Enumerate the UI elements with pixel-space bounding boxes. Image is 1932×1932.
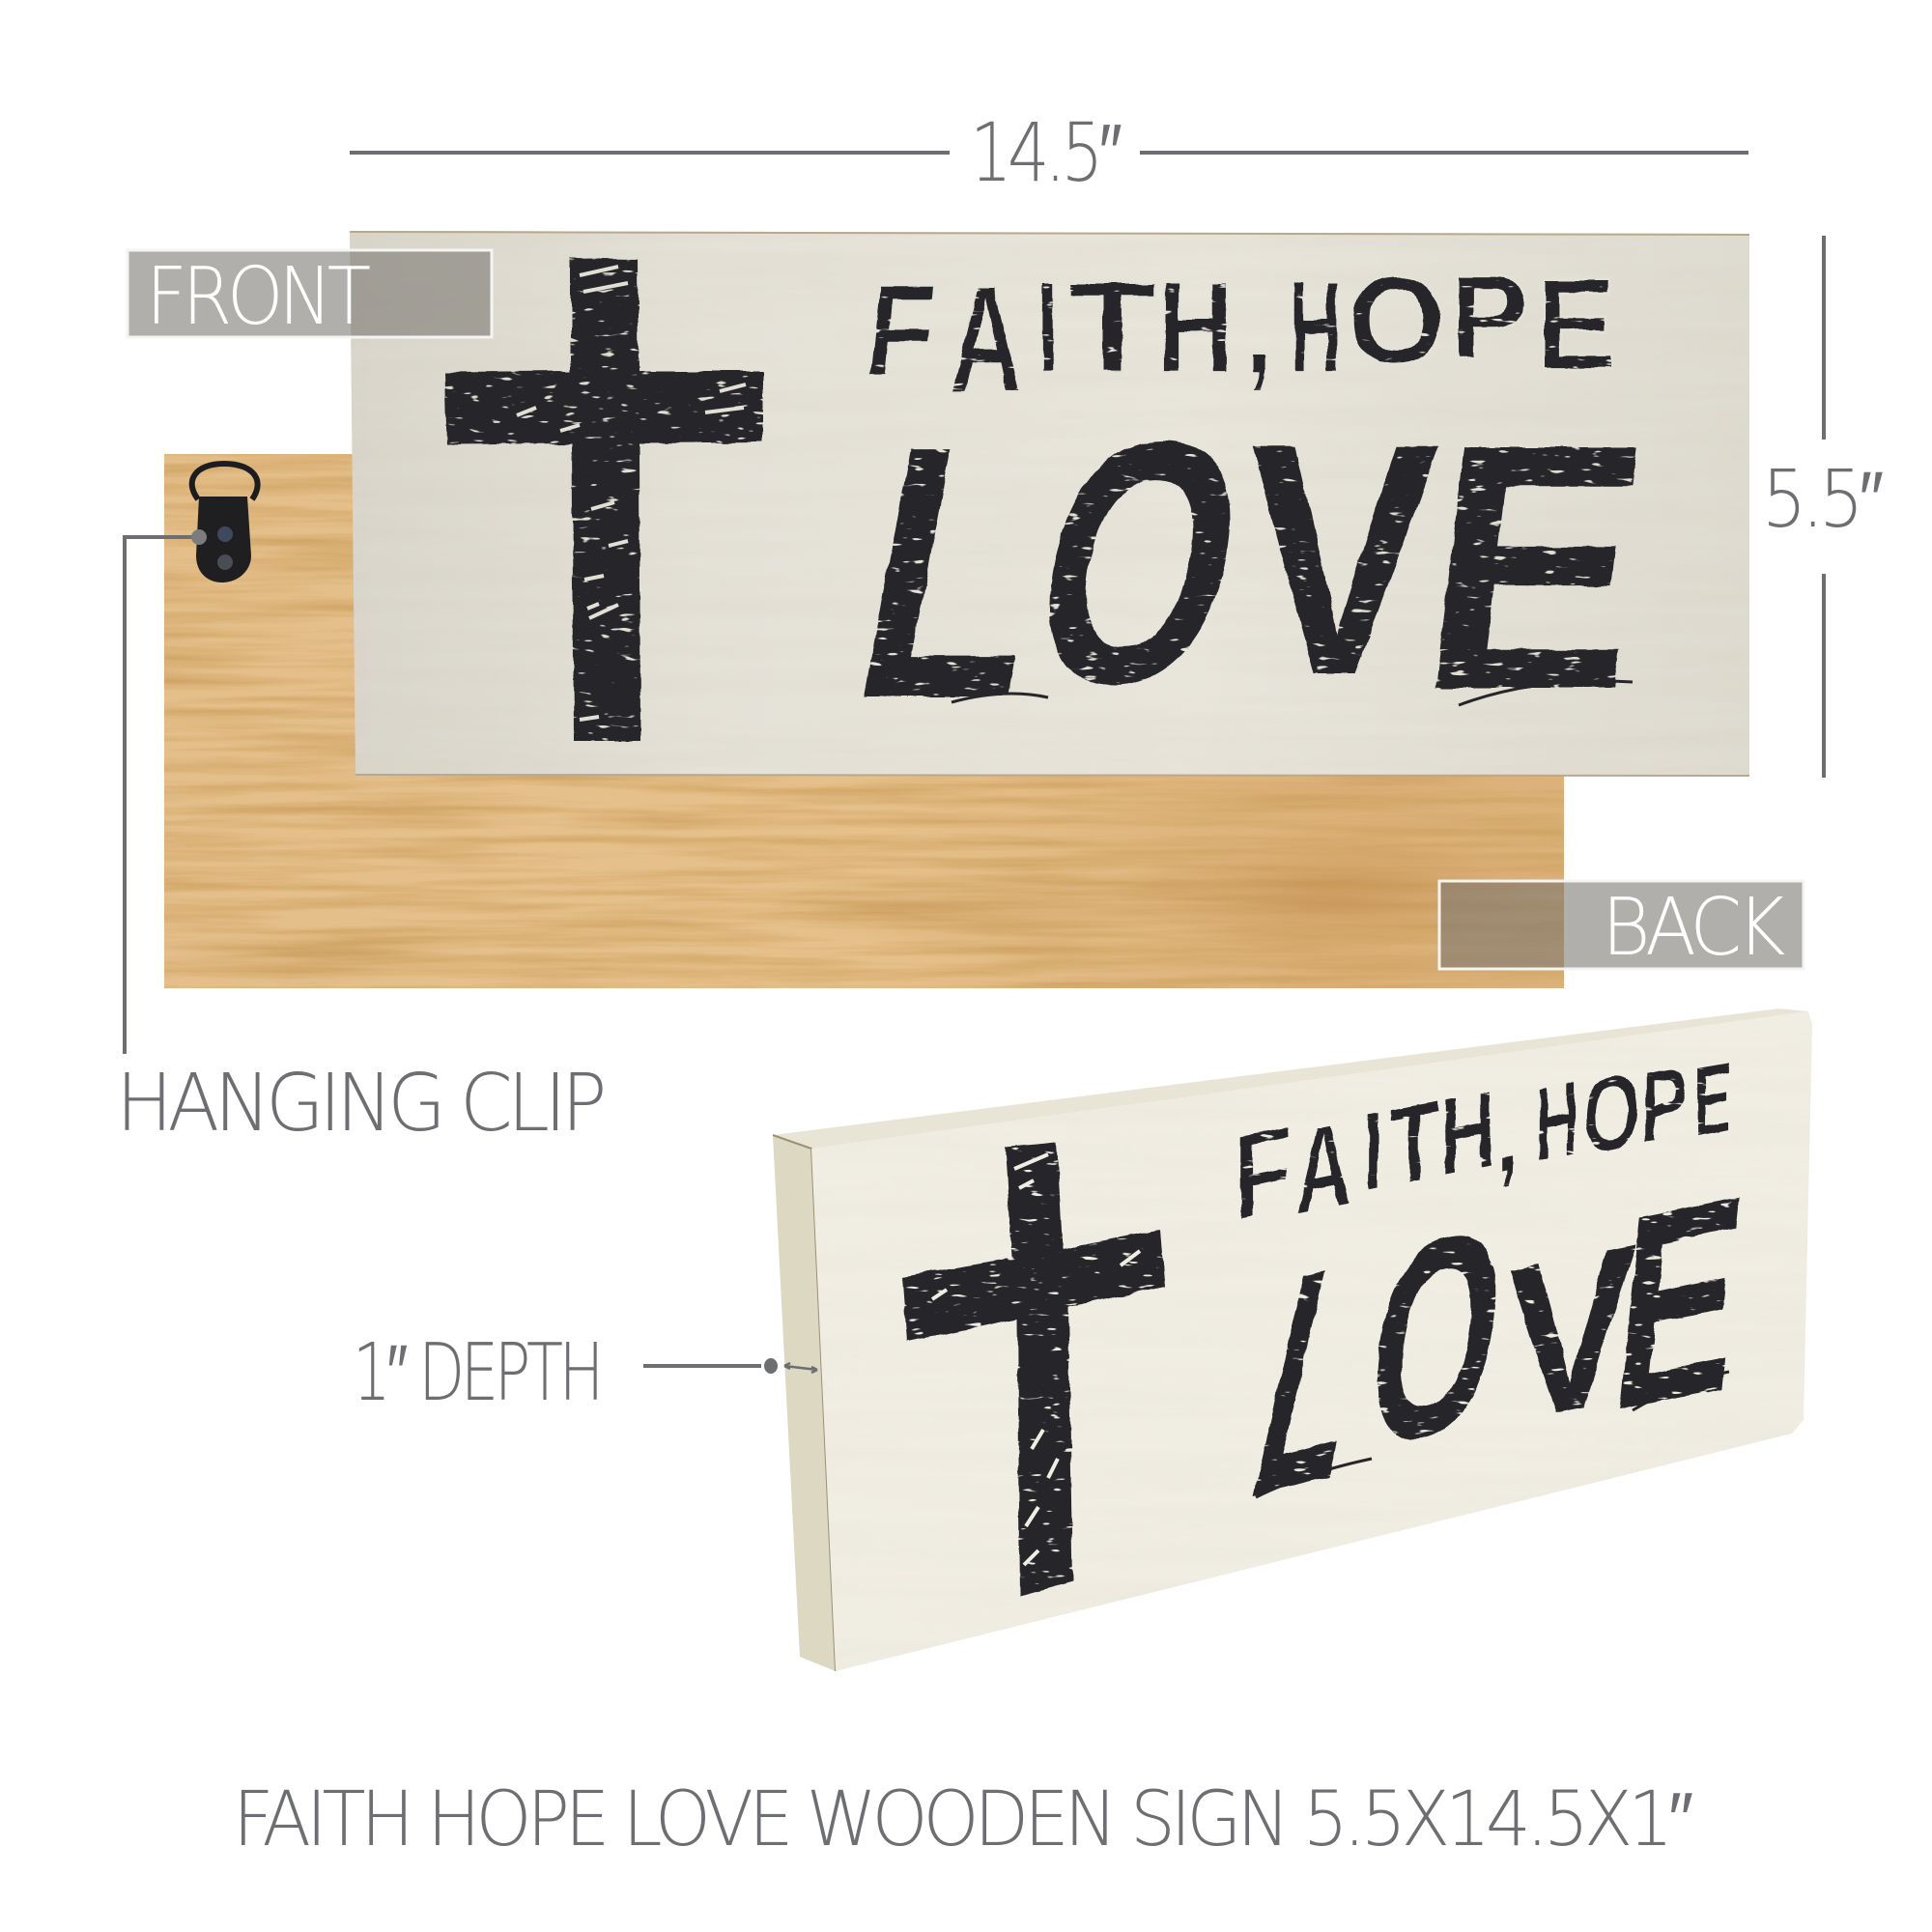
text: FAITH, HOPE, angled: H bbox=[1535, 1058, 1578, 1185]
text: FAITH, HOPE painted lettering: O bbox=[1348, 249, 1446, 390]
title: product name and size: FAITH HOPE LOVE WOODEN SIGN 5.5X14.5X1″ bbox=[233, 1776, 1693, 1863]
text: FAITH, HOPE painted lettering: E bbox=[1536, 252, 1616, 397]
text: FAITH, HOPE, angled: E bbox=[1693, 1040, 1732, 1160]
text: LOVE, angled: O bbox=[1350, 1164, 1522, 1509]
callout: hanging clip leader and label: HANGING CLIP bbox=[116, 1058, 603, 1150]
text: LOVE, angled: E bbox=[1602, 1135, 1756, 1472]
text: FAITH, HOPE painted lettering: H bbox=[1157, 255, 1234, 401]
dimension: height 5.5 inches: 5.5″ bbox=[1762, 454, 1883, 546]
text: LOVE, angled: V bbox=[1504, 1197, 1638, 1471]
text: LOVE painted lettering: E bbox=[1406, 371, 1664, 762]
text: LOVE painted lettering: O bbox=[1006, 369, 1275, 755]
text: FAITH, HOPE, angled: O bbox=[1583, 1050, 1640, 1179]
text: LOVE painted lettering: V bbox=[1236, 375, 1446, 744]
text: FAITH, HOPE painted lettering: , bbox=[1246, 260, 1271, 400]
text: FAITH, HOPE, angled: I bbox=[1362, 1088, 1383, 1215]
icon: hanging clip hardware bbox=[192, 464, 258, 582]
label: BACK tag: BACK bbox=[1602, 882, 1785, 974]
text: FAITH, HOPE, angled: H bbox=[1439, 1065, 1496, 1201]
text: FAITH, HOPE, angled bbox=[1234, 1040, 1732, 1246]
callout: hanging clip leader and label bbox=[116, 529, 603, 1150]
dimension: width 14.5 inches bbox=[350, 105, 1748, 200]
text: FAITH, HOPE painted lettering: F bbox=[860, 256, 941, 404]
text: LOVE painted lettering: L bbox=[831, 373, 1077, 773]
callout: 1 inch depth leader and label: 1″ DEPTH bbox=[353, 1327, 600, 1419]
panel: angled view of sign bbox=[773, 1009, 1812, 1671]
text: FAITH, HOPE, angled: T bbox=[1389, 1076, 1439, 1210]
text: FAITH, HOPE, angled: P bbox=[1640, 1044, 1689, 1166]
text: FAITH, HOPE, angled: , bbox=[1495, 1073, 1520, 1197]
icon: painted cross bbox=[444, 258, 763, 741]
text: FAITH, HOPE painted lettering: A bbox=[949, 252, 1023, 425]
text: FAITH, HOPE, angled: F bbox=[1234, 1101, 1293, 1246]
brush marks under angled LOVE bbox=[1256, 1372, 1729, 1497]
icon: painted cross, angled bbox=[902, 1142, 1165, 1596]
text: LOVE, angled bbox=[1229, 1135, 1756, 1565]
dimension: width 14.5 inches: 14.5″ bbox=[970, 105, 1122, 200]
text: FAITH, HOPE painted lettering bbox=[860, 249, 1616, 425]
text: LOVE, angled: L bbox=[1229, 1187, 1398, 1565]
text: FAITH, HOPE painted lettering: I bbox=[1037, 254, 1059, 400]
text: FAITH, HOPE, angled: A bbox=[1294, 1094, 1352, 1241]
label: BACK tag bbox=[1439, 881, 1804, 974]
text: FAITH, HOPE painted lettering: P bbox=[1449, 252, 1529, 384]
brush marks under LOVE bbox=[869, 667, 1633, 705]
text: FAITH, HOPE painted lettering: T bbox=[1067, 255, 1157, 400]
panel: back of sign, bare wood board bbox=[155, 454, 1564, 988]
text: LOVE painted lettering bbox=[831, 369, 1664, 773]
text: FAITH, HOPE painted lettering: H bbox=[1290, 255, 1342, 401]
label: FRONT tag: FRONT bbox=[146, 251, 370, 343]
panel: front of sign bbox=[350, 231, 1749, 776]
label: FRONT tag bbox=[128, 250, 492, 343]
dimension: height 5.5 inches bbox=[1762, 236, 1883, 778]
